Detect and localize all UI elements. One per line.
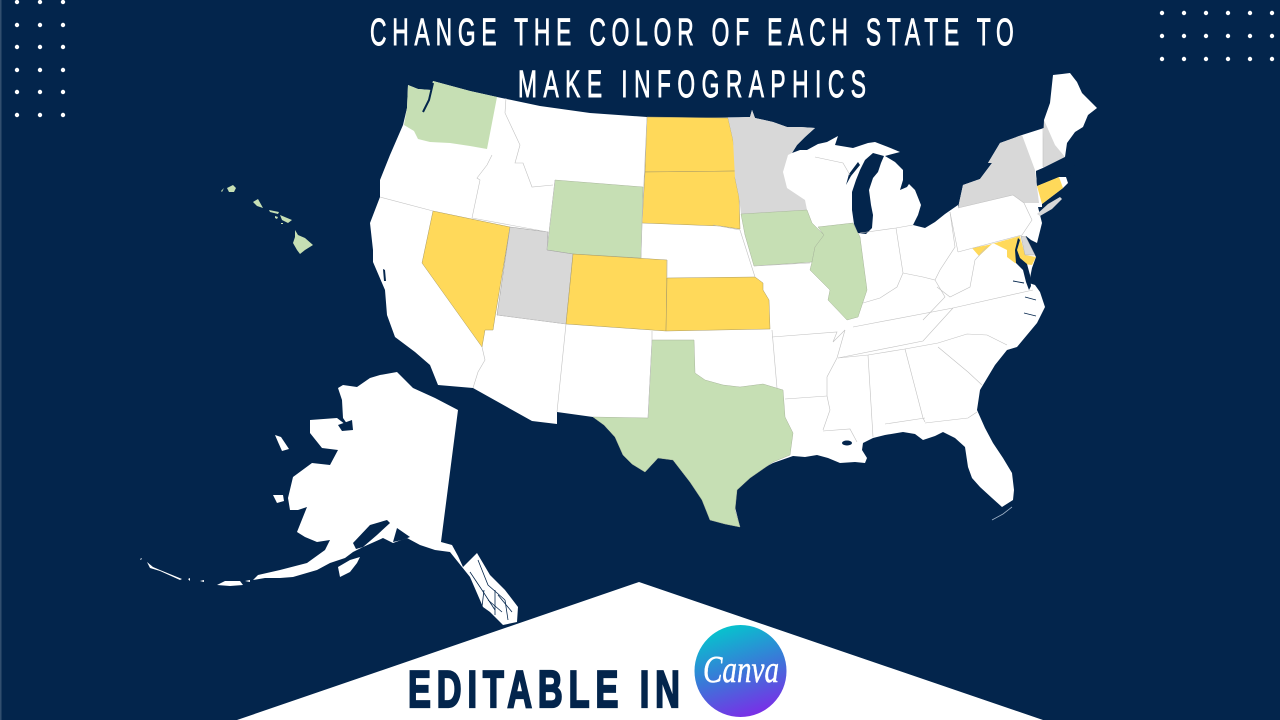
state: Kansas (666, 277, 770, 331)
state: Delaware (1021, 236, 1035, 255)
Norton Sound inlet (338, 420, 353, 431)
state: New York (958, 135, 1039, 208)
map: Hawaii (221, 185, 313, 254)
state: Illinois (810, 223, 867, 320)
bottom banner (237, 582, 1043, 720)
Southeast Alaska channels (470, 560, 512, 620)
Nunivak Island (273, 495, 284, 503)
Lake Pontchartrain (842, 440, 852, 446)
St Lawrence Island (275, 435, 289, 451)
map: contiguous United States (370, 73, 1097, 527)
state: Utah (497, 227, 573, 324)
state borders (380, 98, 1043, 442)
map: Alaska (140, 372, 518, 625)
Big Island (293, 230, 313, 254)
state: North Dakota (645, 117, 737, 172)
state: South Dakota (642, 171, 740, 229)
state: Maryland (972, 236, 1036, 265)
state: New Hampshire (1043, 120, 1065, 168)
Aleutian Islands (140, 558, 250, 586)
dot pattern: top left (15, 0, 65, 117)
Kodiak Island (338, 557, 360, 577)
state: Colorado (566, 254, 667, 331)
Canva logo (694, 625, 786, 717)
Florida Keys (992, 507, 1012, 520)
state: Long Island (1037, 197, 1062, 216)
Cook Inlet (353, 520, 390, 549)
Oahu (253, 199, 263, 208)
white state silhouette (370, 73, 1097, 527)
state: Iowa (741, 210, 824, 266)
Prince William Sound (393, 528, 410, 542)
dot pattern: top right (1160, 11, 1274, 61)
Virginia coastal inlets (1013, 281, 1036, 316)
San Francisco Bay (383, 269, 386, 281)
state: Massachusetts cutout (1036, 157, 1075, 186)
Lake Michigan (852, 153, 884, 234)
text: editable in: EDITABLE IN (408, 661, 680, 719)
Alaska mainland and panhandle (253, 372, 518, 625)
Kauai and Niihau (221, 185, 236, 192)
state: Nevada (422, 211, 510, 347)
title line 1: CHANGE THE COLOR OF EACH STATE TO (370, 11, 1014, 53)
state: Texas (593, 340, 793, 527)
Green Bay (846, 162, 860, 185)
Puget Sound (423, 83, 433, 112)
white triangle (237, 582, 1043, 720)
title line 2: MAKE INFOGRAPHICS (518, 63, 866, 105)
state: Connecticut (1037, 177, 1063, 204)
Molokai and Maui (269, 210, 292, 224)
title (370, 11, 1014, 105)
state: Washington (404, 81, 497, 149)
state: Wyoming (547, 180, 643, 258)
state: Minnesota (728, 110, 815, 214)
Canva logo: Canva (703, 649, 779, 691)
Chesapeake Bay (1015, 238, 1031, 290)
